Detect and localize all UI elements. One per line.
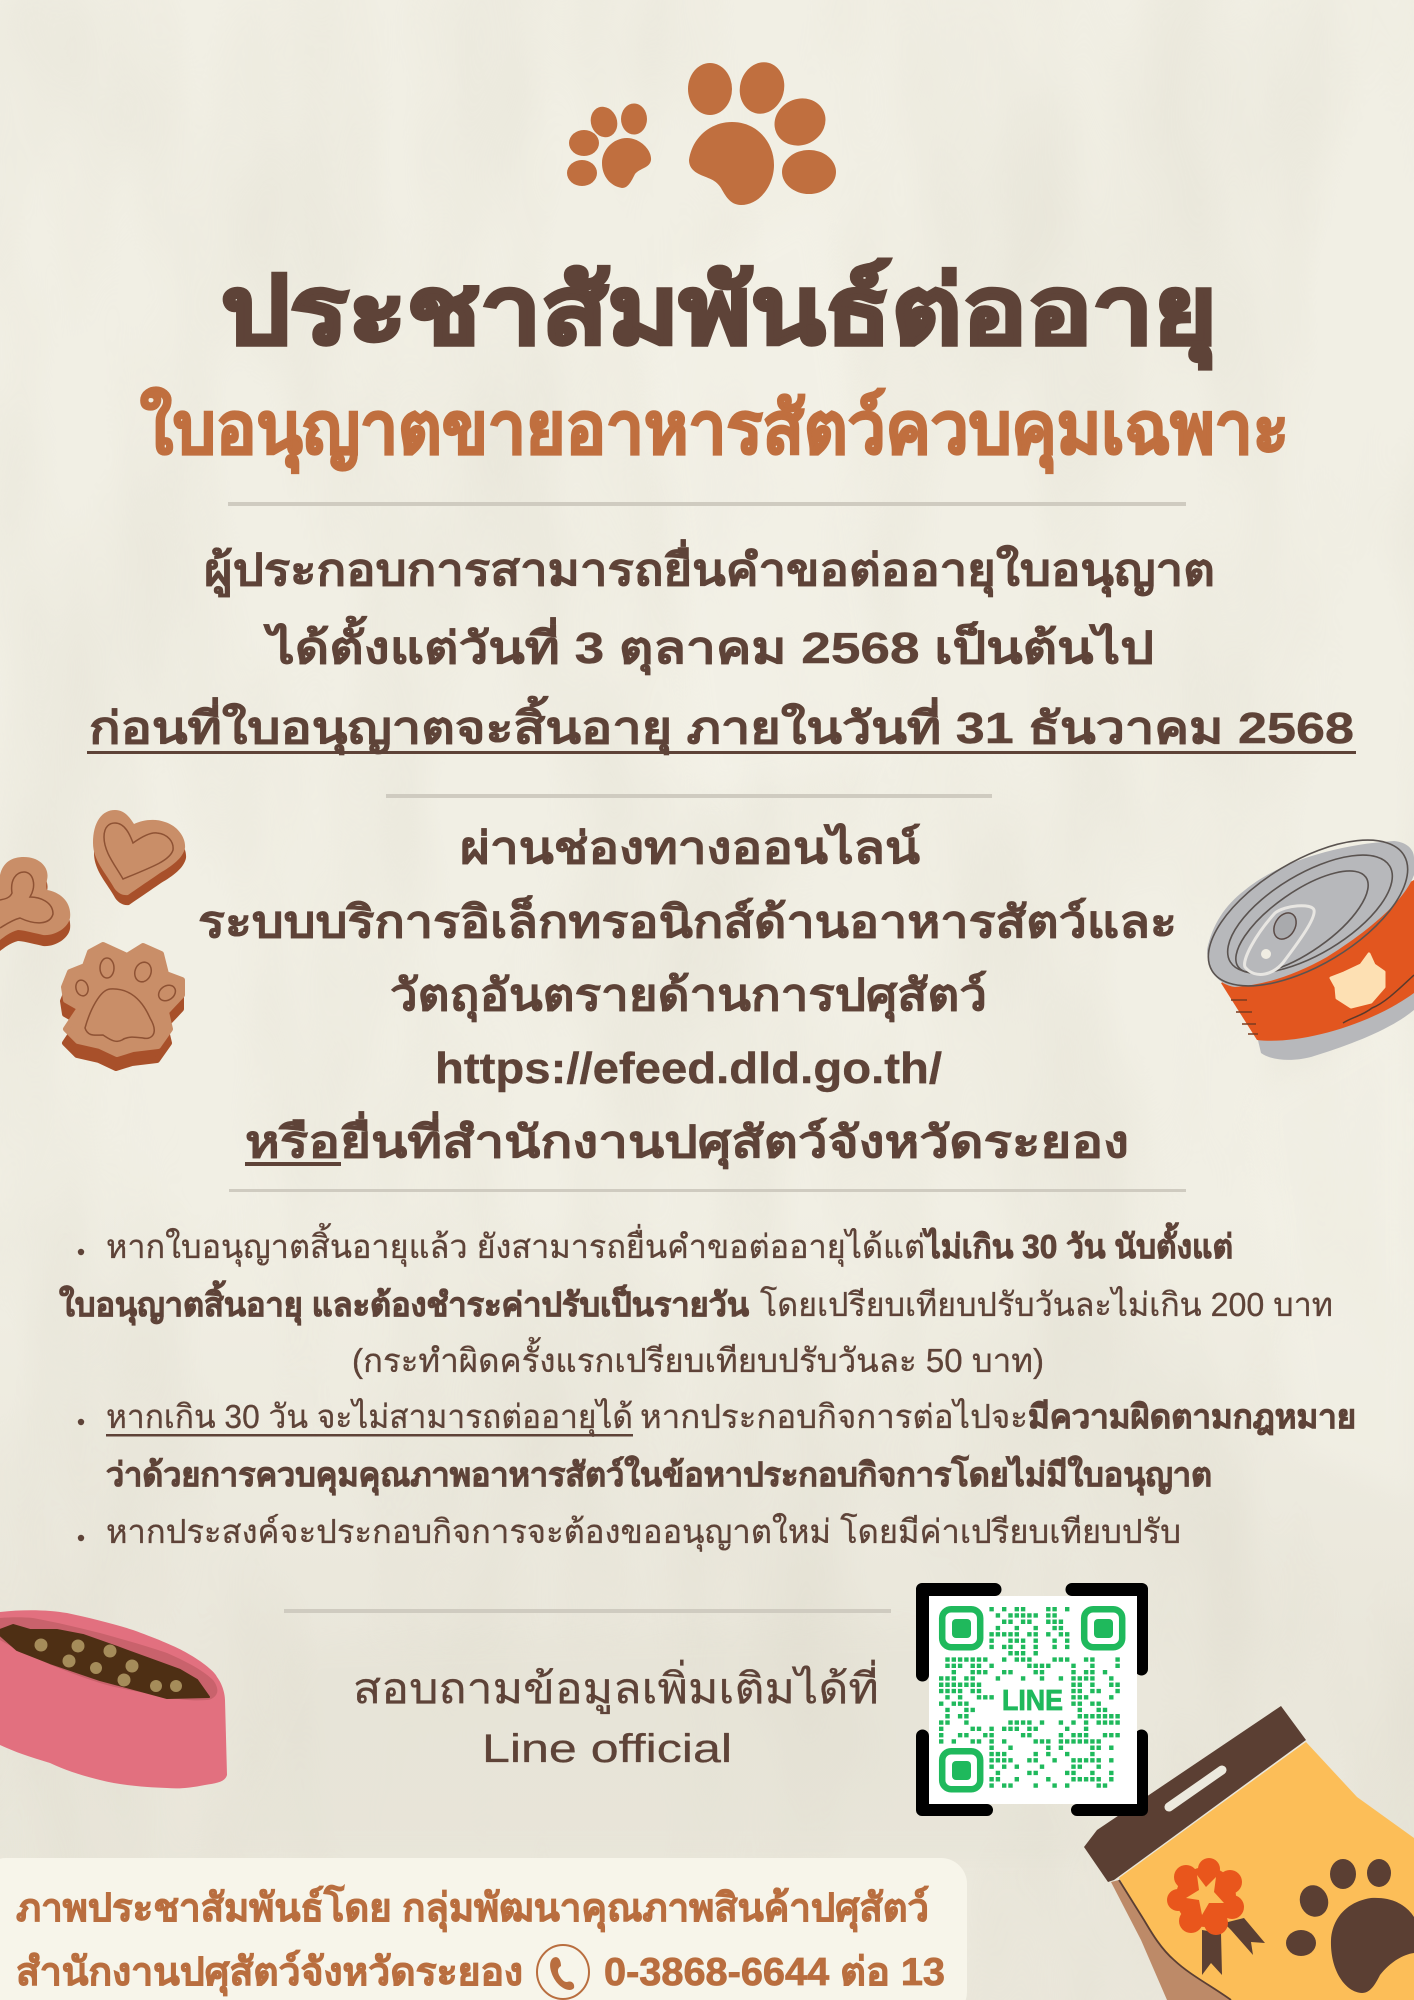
icon: two paw prints [567,57,836,205]
text block: penalty conditions: หากประกอบกิจการต่อไปจะ [640,1398,1028,1435]
phone number: 0-3868-6644 ต่อ 13 [604,1951,945,1994]
title: ประชาสัมพันธ์ต่ออายุ [221,258,1217,369]
divider [229,1189,1186,1192]
text block: penalty conditions: มีความผิดตามกฎหมาย [1028,1398,1356,1435]
text block: penalty conditions: ไม่เกิน 30 วัน นับตั้งแต่ [922,1222,1233,1265]
subtitle: ใบอนุญาตขายอาหารสัตว์ควบคุมเฉพาะ [140,386,1289,474]
icon: paw cookie [63,945,182,1068]
text block: online channel [198,822,1177,1170]
icon: pink food bowl [0,1610,227,1788]
text block: online channel: https://efeed.dld.go.th/ [435,1044,942,1093]
text block: penalty conditions: โดยเปรียบเทียบปรับวันละไม่เกิน 200 บาท [760,1286,1333,1323]
QR code: Line official [916,1583,1148,1816]
text block: online channel: ระบบบริการอิเล็กทรอนิกส์ด้านอาหารสัตว์และ [198,895,1177,947]
footer line 2: สำนักงานปศุสัตว์จังหวัดระยอง [16,1949,523,1996]
text block: renewal notice: ได้ตั้งแต่วันที่ 3 ตุลาคม 2568 เป็นต้นไป [263,615,1154,676]
text block: penalty conditions [59,1222,1356,1552]
text block: online channel: หรือยื่นที่สำนักงานปศุสัตว์จังหวัดระยอง [245,1111,1129,1170]
divider [228,502,1186,506]
icon: pet food bag [1084,1706,1414,2000]
icon: pet food can [1185,811,1414,1060]
text block: penalty conditions: (กระทำผิดครั้งแรกเปรียบเทียบปรับวันละ 50 บาท) [352,1337,1044,1379]
text block: penalty conditions: หากประสงค์จะประกอบกิจการจะต้องขออนุญาตใหม่ โดยมีค่าเปรียบเทียบปรับ [106,1513,1181,1552]
text block: penalty conditions: หากเกิน 30 วัน จะไม่สามารถต่ออายุได้ [106,1398,633,1437]
divider [386,794,992,798]
icon: phone [537,1945,589,1999]
text block: penalty conditions: ว่าด้วยการควบคุมคุณภาพอาหารสัตว์ในข้อหาประกอบกิจการโดยไม่มีใบอนุญาต [106,1455,1212,1496]
icon: heart cookie [93,810,186,905]
QR code: Line official: LINE [1002,1685,1063,1717]
text block: online channel: ผ่านช่องทางออนไลน์ [460,822,921,873]
icon: club cookie [0,857,70,951]
text: enquiries: สอบถามข้อมูลเพิ่มเติมได้ที่ [353,1660,879,1714]
text block: renewal notice: ผู้ประกอบการสามารถยื่นคำขอต่ออายุใบอนุญาต [204,539,1215,598]
divider [284,1609,891,1613]
footer line 1: ภาพประชาสัมพันธ์โดย กลุ่มพัฒนาคุณภาพสินค้าปศุสัตว์ [16,1885,929,1932]
text block: renewal notice [87,539,1356,756]
text: line official: Line official [482,1727,732,1771]
footer panel [0,1858,967,2000]
text block: penalty conditions: ใบอนุญาตสิ้นอายุ และต้องชำระค่าปรับเป็นรายวัน [59,1280,749,1326]
text block: renewal notice: ก่อนที่ใบอนุญาตจะสิ้นอายุ ภายในวันที่ 31 ธันวาคม 2568 [89,695,1354,756]
text block: online channel: วัตถุอันตรายด้านการปศุสัตว์ [390,970,987,1023]
text block: penalty conditions: หากใบอนุญาตสิ้นอายุแล้ว ยังสามารถยื่นคำขอต่ออายุได้แต่ [106,1223,925,1267]
